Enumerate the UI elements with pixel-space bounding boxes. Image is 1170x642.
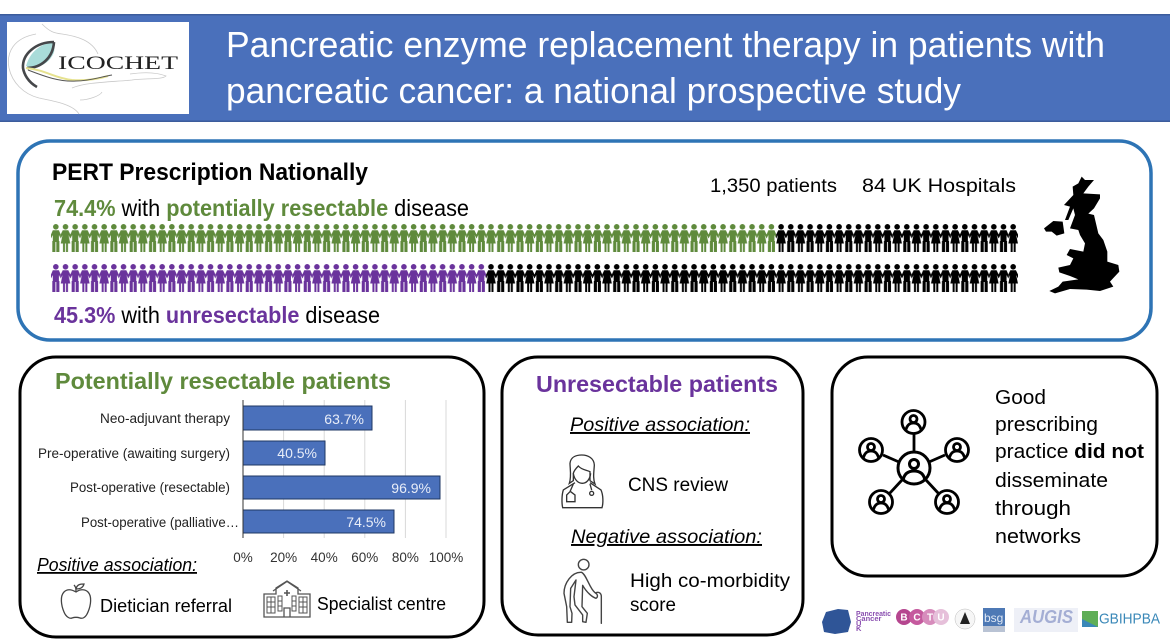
heading: PERT prescription: PERT Prescription Nationally [52,159,369,186]
label: high co-morbidity score [630,570,790,616]
title: Pancreatic enzyme replacement therapy in patients with [226,24,1105,65]
bar chart: Post-operative (palliative… [81,515,239,530]
stat: resectable 74.4%: 74.4% with potentially resectable disease [54,195,469,221]
bar chart: 100% [429,550,463,565]
logo: BSG [983,608,1005,632]
text: good prescribing practice: networks [995,525,1081,548]
icon: nurse [562,455,603,508]
icon: apple [61,584,91,618]
logo: Pancreatic Cancer UK [856,609,891,633]
bar chart [38,400,463,565]
logo: GBIHPBA: GBIHPBA [1099,610,1160,628]
icon: hospital [264,581,310,617]
bar chart: 60% [351,550,378,565]
stat: unresectable 45.3%: 45.3% with unresectable disease [54,302,380,328]
partner logos [822,607,1160,634]
logo: society crest [955,609,975,629]
bar chart: 96.9% [391,480,431,496]
stat: hospitals: 84 UK Hospitals [862,175,1016,197]
logo: AUGIS: AUGIS [1019,607,1073,627]
logo: BCTU: C [913,612,921,624]
bar chart: 20% [270,550,297,565]
heading: potentially resectable: Potentially resectable patients [55,368,391,394]
logo: regional network [822,609,851,634]
bar chart: 74.5% [346,514,386,530]
subheading: positive association: Positive association: [37,555,197,575]
icon: UK map [1044,177,1119,293]
logo: Pancreatic Cancer UK: Pancreatic [856,609,891,618]
title: pancreatic cancer: a national prospective study [226,70,961,111]
text: good prescribing practice: prescribing [995,413,1098,436]
bar chart: 0% [233,550,253,565]
logo: Pancreatic Cancer UK: K [856,624,862,633]
bar chart: 40.5% [277,445,317,461]
label: high co-morbidity score: High co-morbidity [630,570,790,592]
logo: BCTU: U [937,612,945,624]
logo: RICOCHET [7,22,189,114]
bar chart: 40% [311,550,338,565]
bar chart: 80% [392,550,419,565]
label: high co-morbidity score: score [630,594,676,616]
label: specialist centre: Specialist centre [317,594,446,614]
pictogram row: resectable [51,224,1018,252]
panel: unresectable patients [502,357,803,635]
bar chart: Pre-operative (awaiting surgery) [38,446,230,461]
logo: BCTU [896,609,949,625]
logo: BCTU: B [900,612,908,624]
bar chart: 63.7% [324,411,364,427]
subheading: positive association: Positive association: [570,414,750,436]
text: good prescribing practice: Good [995,386,1046,409]
bar chart: Post-operative (resectable) [70,480,230,495]
logo: BCTU: T [927,612,933,624]
label: CNS review: CNS review [628,474,729,496]
heading: unresectable: Unresectable patients [536,371,778,397]
logo: Pancreatic Cancer UK: Cancer [856,614,882,623]
label: dietician referral: Dietician referral [100,596,232,616]
panel: potentially resectable patients [20,357,484,637]
subheading: negative association: Negative association: [571,526,762,548]
text: good prescribing practice: disseminate [995,469,1108,492]
text: good prescribing practice: through [995,497,1071,520]
pictogram row: unresectable [51,264,1018,292]
header banner [0,14,1170,122]
logo: RICOCHET: ICOCHET [58,53,179,74]
text: good prescribing practice: practice did not [995,440,1144,463]
panel: prescribing networks [832,357,1157,576]
logo: BSG: bsg [984,611,1003,625]
title [226,24,1105,111]
bar chart: Neo-adjuvant therapy [100,411,230,426]
logo: Pancreatic Cancer UK: U [856,619,861,628]
icon: elderly person with cane [564,559,601,623]
panel: PERT prescription nationally [18,141,1151,340]
text: good prescribing practice [995,386,1144,548]
icon: network of people [860,410,968,514]
stat: patients: 1,350 patients [710,175,837,197]
